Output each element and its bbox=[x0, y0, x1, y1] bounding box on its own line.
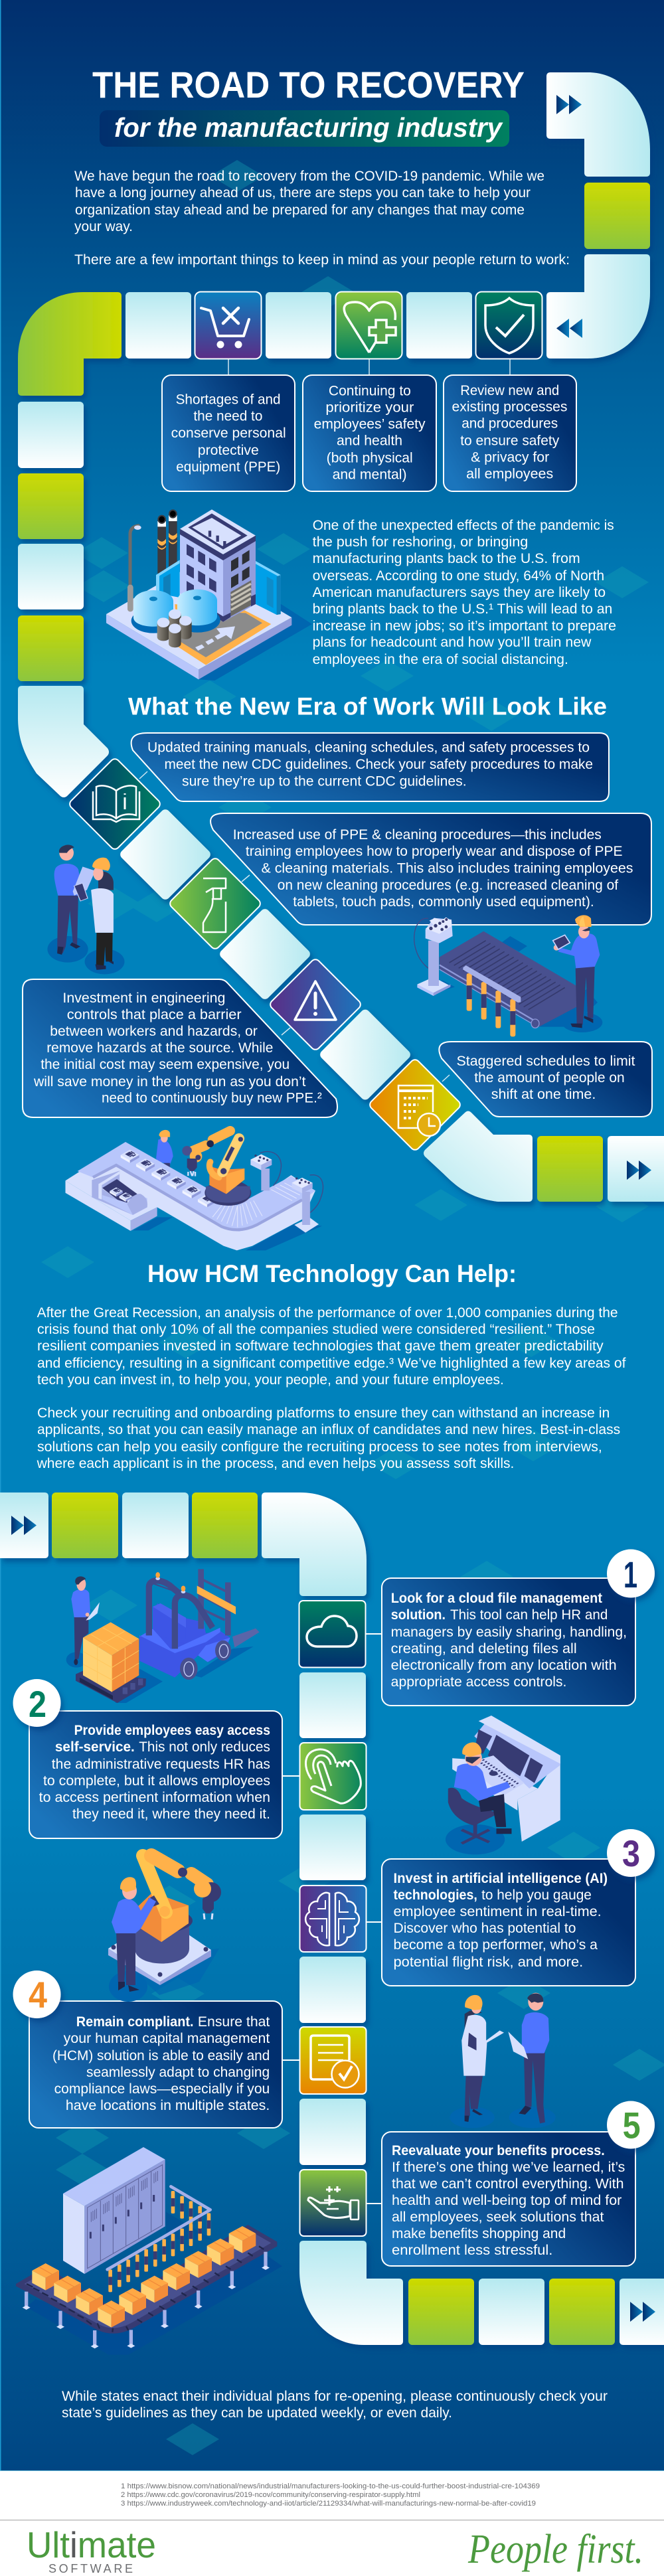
footnotes: 3 https://www.industryweek.com/technology-and-iiot/article/21129334/what-will-manufacturings-new-normal-be-after-covid19 bbox=[121, 2500, 536, 2508]
step 2 panel: to access pertinent information when bbox=[39, 1790, 270, 1805]
HCM paragraphs: solutions can help you easily configure the recruiting process to see notes from interviews, bbox=[37, 1439, 602, 1455]
step 3 panel: potential flight risk, and more. bbox=[393, 1955, 583, 1970]
callout: staggered schedules: shift at one time. bbox=[491, 1087, 596, 1102]
step 5 panel: make benefits shopping and bbox=[392, 2226, 566, 2241]
HCM paragraphs: Check your recruiting and onboarding platforms to ensure they can withstand an increase in bbox=[37, 1406, 610, 1421]
panel: review procedures: existing processes bbox=[452, 400, 567, 415]
step 3 panel: Discover who has potential to bbox=[393, 1921, 576, 1936]
illustration: factory bbox=[106, 509, 312, 681]
callout: PPE and cleaning: tablets, touch pads, commonly used equipment). bbox=[293, 894, 594, 910]
panel: review procedures bbox=[444, 375, 576, 491]
step 4 number: 4 bbox=[29, 1974, 47, 2016]
factory text: overseas. According to one study, 64% of North bbox=[313, 568, 604, 584]
footnotes: 1 https://www.bisnow.com/national/news/industrial/manufacturers-looking-to-the-us-could-further-boost-industrial-cre-104369 bbox=[121, 2482, 540, 2490]
HCM paragraphs: resilient companies invested in software technologies that gave them greater predictability bbox=[37, 1338, 604, 1354]
illustration: control console operator bbox=[446, 1716, 560, 1854]
panel: employee safety bbox=[303, 375, 436, 491]
step 4 panel: seamlessly adapt to changing bbox=[86, 2065, 270, 2080]
step 2 number: 2 bbox=[29, 1683, 46, 1725]
illustration: conveyor inspection bbox=[414, 915, 602, 1036]
subtitle pill: for the manufacturing industry bbox=[114, 112, 503, 143]
icon: AI brain bbox=[300, 1886, 367, 1952]
step 2 panel: self-service. bbox=[55, 1739, 135, 1755]
closing text: state’s guidelines as they can be updated weekly, or even daily. bbox=[62, 2405, 452, 2421]
HCM paragraphs: where each applicant is in the process, and even helps you assess soft skills. bbox=[37, 1456, 514, 1471]
step 3 number bbox=[607, 1829, 655, 1877]
panel: review procedures: Review new and bbox=[460, 383, 559, 398]
step 2 panel: to complete, but it allows employees bbox=[43, 1773, 270, 1789]
step 5 number bbox=[607, 2101, 655, 2148]
footnotes bbox=[121, 2482, 540, 2508]
callout: engineering controls: Investment in engineering bbox=[62, 991, 225, 1006]
icon: manual book bbox=[68, 757, 162, 851]
icon: calendar clock bbox=[368, 1058, 462, 1152]
connector lines to step boxes bbox=[282, 1634, 382, 2204]
step 4 panel: Remain compliant. bbox=[76, 2014, 194, 2030]
step 2 panel: Provide employees easy access bbox=[74, 1723, 270, 1738]
icon: heart with plus bbox=[336, 292, 402, 359]
HCM paragraphs: After the Great Recession, an analysis of the performance of over 1,000 companies during the bbox=[37, 1305, 618, 1321]
step 2 panel: they need it, where they need it. bbox=[72, 1807, 270, 1822]
callout: training manuals bbox=[131, 733, 609, 801]
panel: PPE shortages: Shortages of and bbox=[176, 392, 281, 408]
arrow: forward bbox=[556, 95, 582, 114]
intro text: have a long journey ahead of us, there are steps you can take to help your bbox=[75, 185, 531, 201]
icon: shield check bbox=[475, 292, 542, 359]
intro text bbox=[74, 169, 570, 268]
step 3 panel: technologies, bbox=[393, 1888, 477, 1903]
icon: compliance document bbox=[300, 2027, 367, 2094]
factory text bbox=[313, 518, 616, 667]
factory text: increase in new jobs; so it’s important to prepare bbox=[313, 618, 616, 633]
step 5 panel: Reevaluate your benefits process. bbox=[392, 2143, 605, 2158]
step 5 panel: enrollment less stressful. bbox=[392, 2243, 552, 2258]
step 3 panel bbox=[382, 1859, 635, 1986]
panel: employee safety: Continuing to bbox=[329, 384, 411, 399]
callout: training manuals: meet the new CDC guidelines. Check your safety procedures to make bbox=[165, 757, 593, 772]
intro text: organization stay ahead and be prepared for any changes that may come bbox=[75, 202, 525, 218]
illustration: robot arm and worker bbox=[108, 1856, 221, 2002]
step 1 panel: Look for a cloud file management bbox=[391, 1591, 602, 1606]
step 4 number bbox=[13, 1971, 61, 2018]
factory text: the push for reshoring, or bringing bbox=[313, 534, 528, 550]
icon: spray bottle bbox=[168, 856, 262, 951]
road: diagonal section bbox=[118, 807, 664, 1202]
illustration: assembly line with robot bbox=[65, 1130, 323, 1250]
step 3 panel: employee sentiment in real-time. bbox=[393, 1904, 602, 1919]
step 1 panel: appropriate access controls. bbox=[391, 1674, 566, 1690]
closing text: While states enact their individual plans for re-opening, please continuously check your bbox=[62, 2389, 608, 2404]
footer panel bbox=[0, 2471, 664, 2576]
step 1 panel bbox=[382, 1578, 635, 1706]
callout: PPE and cleaning: on new cleaning procedures (e.g. increased cleaning of bbox=[278, 878, 618, 893]
step 3 panel: to help you gauge bbox=[481, 1888, 592, 1903]
panel: PPE shortages: equipment (PPE) bbox=[176, 459, 280, 475]
illustration: two people talking bbox=[47, 845, 125, 974]
intro text: your way. bbox=[74, 219, 133, 234]
factory text: One of the unexpected effects of the pandemic is bbox=[313, 518, 614, 533]
step 5 panel: If there’s one thing we’ve learned, it’s bbox=[392, 2160, 625, 2175]
step 4 panel: your human capital management bbox=[64, 2031, 270, 2046]
step 1 panel: managers by easily sharing, handling, bbox=[391, 1625, 627, 1640]
step 5 panel: all employees, seek solutions that bbox=[392, 2210, 604, 2225]
heading: new era of work: What the New Era of Work Will Look Like bbox=[128, 693, 607, 720]
arrow: forward bbox=[627, 1161, 651, 1180]
panel: review procedures: all employees bbox=[466, 466, 553, 482]
step 2 panel bbox=[29, 1711, 282, 1838]
panel: PPE shortages: the need to bbox=[193, 408, 262, 424]
step 1 panel: solution. bbox=[391, 1607, 446, 1623]
arrow: forward bbox=[11, 1516, 37, 1535]
HCM paragraphs bbox=[37, 1305, 626, 1471]
callout: training manuals: Updated training manuals, cleaning schedules, and safety processes to bbox=[147, 740, 590, 756]
step 3 number: 3 bbox=[622, 1832, 640, 1874]
step 2 number bbox=[13, 1679, 61, 1727]
icon: cart shortage bbox=[195, 292, 262, 359]
callout: staggered schedules bbox=[439, 1042, 652, 1117]
road: top section bbox=[18, 72, 650, 797]
step 4 panel: have locations in multiple states. bbox=[66, 2098, 270, 2113]
road: lower section bbox=[0, 1492, 664, 2345]
step 1 number bbox=[607, 1550, 655, 1597]
step 1 panel: creating, and deleting files all bbox=[391, 1641, 577, 1656]
callout: training manuals: sure they’re up to the current CDC guidelines. bbox=[182, 774, 467, 789]
factory text: plans for headcount and how you’ll train new bbox=[313, 635, 592, 650]
step 2 panel: This not only reduces bbox=[139, 1739, 270, 1755]
step 4 panel: Ensure that bbox=[198, 2014, 270, 2030]
panel: PPE shortages: conserve personal bbox=[171, 426, 286, 441]
logo: Ultimate Software: SOFTWARE bbox=[48, 2562, 133, 2575]
step 5 panel: that we can’t control everything. With bbox=[392, 2176, 624, 2192]
icon: touch bbox=[300, 1743, 367, 1810]
callout: staggered schedules: the amount of people on bbox=[474, 1070, 625, 1086]
HCM paragraphs: and efficiency, resulting in a significant competitive edge.³ We’ve highlighted a few key areas of bbox=[37, 1356, 626, 1371]
step 1 panel: electronically from any location with bbox=[391, 1658, 617, 1673]
step 4 panel: (HCM) solution is able to easily and bbox=[52, 2048, 270, 2063]
heading: how HCM helps: How HCM Technology Can Help: bbox=[147, 1260, 517, 1287]
tagline: People first: People first. bbox=[467, 2527, 643, 2572]
callout: PPE and cleaning: & cleaning materials. This also includes training employees bbox=[262, 860, 633, 876]
HCM paragraphs: applicants, so that you can easily manage an influx of candidates and new hires. Best-in-class bbox=[37, 1422, 620, 1437]
footnotes: 2 https://www.cdc.gov/coronavirus/2019-ncov/community/conserving-respirator-supply.html bbox=[121, 2491, 420, 2499]
icon: cloud bbox=[299, 1601, 365, 1668]
step 5 panel bbox=[382, 2132, 635, 2266]
title: THE ROAD TO RECOVERY bbox=[92, 64, 525, 106]
step 4 panel bbox=[29, 2001, 282, 2128]
panel: review procedures: & privacy for bbox=[471, 450, 549, 465]
callout: PPE and cleaning: training employees how to properly wear and dispose of PPE bbox=[246, 844, 622, 859]
callout: PPE and cleaning: Increased use of PPE & cleaning procedures—this includes bbox=[233, 827, 602, 843]
callout: engineering controls: remove hazards at the source. While bbox=[46, 1040, 273, 1056]
panel: PPE shortages: protective bbox=[198, 443, 259, 458]
connector lines bbox=[228, 359, 510, 376]
panel: employee safety: (both physical bbox=[327, 450, 413, 465]
HCM paragraphs: crisis found that only 10% of all the companies studied were considered “resilient.” Those bbox=[37, 1322, 595, 1337]
panel: employee safety: prioritize your bbox=[325, 400, 414, 416]
step 1 number: 1 bbox=[623, 1554, 637, 1595]
factory text: bring plants back to the U.S.¹ This will lead to an bbox=[313, 602, 612, 617]
factory text: employees in the era of social distancing. bbox=[313, 652, 568, 667]
panel: review procedures: to ensure safety bbox=[460, 433, 560, 448]
step 1 panel: This tool can help HR and bbox=[450, 1607, 608, 1623]
panel: employee safety: employees’ safety bbox=[314, 416, 426, 432]
step 2 panel: the administrative requests HR has bbox=[52, 1757, 270, 1772]
intro text: We have begun the road to recovery from the COVID-19 pandemic. While we bbox=[74, 169, 544, 184]
illustration: two colleagues reviewing bbox=[450, 1993, 556, 2128]
panel: review procedures: and procedures bbox=[461, 416, 558, 432]
illustration: forklift and pallet bbox=[66, 1569, 260, 1703]
arrow: back bbox=[556, 319, 582, 338]
callout: engineering controls: will save money in the long run as you don’t bbox=[33, 1074, 306, 1089]
step 3 panel: become a top performer, who’s a bbox=[393, 1937, 598, 1953]
arrow: forward bbox=[630, 2302, 655, 2322]
panel: employee safety: and health bbox=[337, 434, 402, 449]
logo: Ultimate Software: Ultimate bbox=[27, 2524, 156, 2565]
icon: caring hand bbox=[300, 2170, 367, 2236]
connector lines to diamonds bbox=[139, 771, 450, 1082]
step 5 number: 5 bbox=[623, 2105, 641, 2146]
callout: PPE and cleaning bbox=[210, 813, 651, 925]
panel: PPE shortages bbox=[162, 375, 295, 491]
illustration: lockers and box conveyor bbox=[16, 2147, 282, 2355]
callout: engineering controls: between workers and hazards, or bbox=[50, 1024, 258, 1039]
factory text: American manufacturers says they are likely to bbox=[313, 585, 606, 600]
callout: engineering controls bbox=[23, 979, 337, 1117]
icon: warning triangle bbox=[268, 957, 363, 1052]
callout: engineering controls: need to continuously buy new PPE.² bbox=[102, 1091, 322, 1106]
callout: engineering controls: the initial cost may seem expensive, you bbox=[41, 1057, 290, 1072]
HCM paragraphs: tech you can invest in, to help you, your people, and your future employees. bbox=[37, 1372, 504, 1388]
step 5 panel: health and well-being top of mind for bbox=[392, 2193, 622, 2208]
callout: staggered schedules: Staggered schedules to limit bbox=[457, 1054, 635, 1069]
callout: engineering controls: controls that place a barrier bbox=[67, 1007, 242, 1022]
panel: employee safety: and mental) bbox=[333, 467, 407, 483]
closing text bbox=[62, 2389, 608, 2421]
step 4 panel: compliance laws—especially if you bbox=[54, 2081, 270, 2097]
intro text: There are a few important things to keep in mind as your people return to work: bbox=[74, 252, 570, 268]
factory text: manufacturing plants back to the U.S. from bbox=[313, 551, 580, 566]
step 3 panel: Invest in artificial intelligence (AI) bbox=[393, 1871, 608, 1886]
